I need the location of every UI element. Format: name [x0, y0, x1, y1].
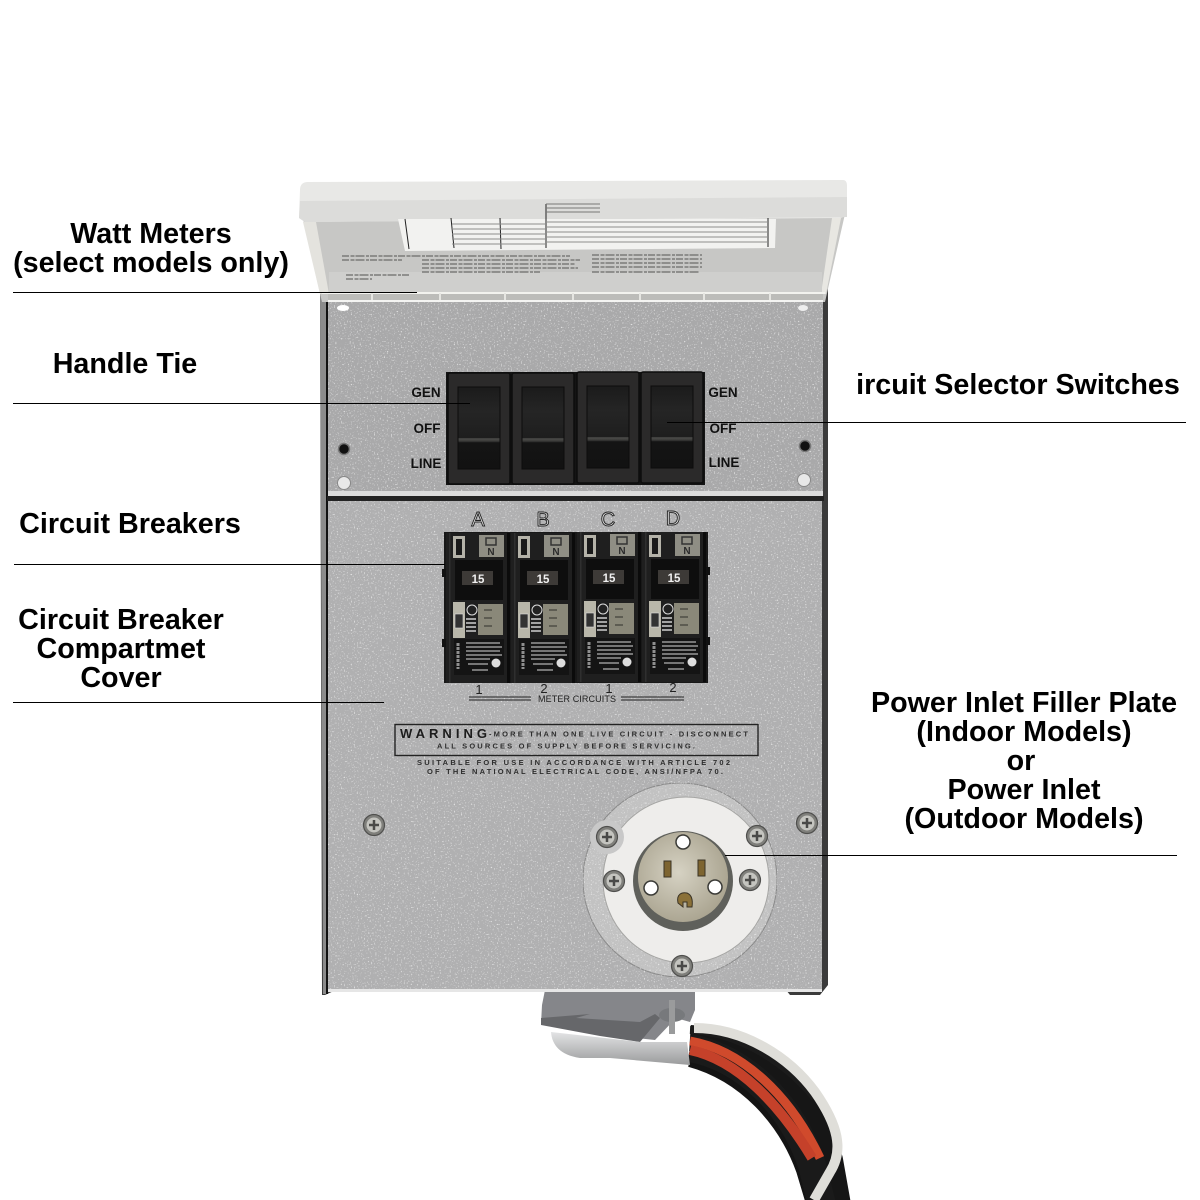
label: power inlet: (Outdoor Models): [904, 803, 1144, 835]
left position labels: LINE: [411, 456, 441, 471]
circuit breaker compartment cover: [328, 501, 822, 991]
code notice: [417, 758, 730, 776]
lid instruction label: [342, 204, 776, 279]
label: power inlet: [871, 687, 1177, 835]
left position labels: GEN: [411, 385, 441, 400]
warning box: WARNING: [400, 726, 487, 741]
right position labels: LINE: [709, 455, 739, 470]
warning box: [395, 724, 758, 756]
code notice: SUITABLE FOR USE IN ACCORDANCE WITH ARTICLE 702: [417, 758, 730, 767]
right position labels: GEN: [708, 385, 738, 400]
label: handle tie: Handle Tie: [53, 348, 197, 380]
label: power inlet: Power Inlet Filler Plate: [871, 687, 1177, 719]
selector switches: [446, 372, 705, 485]
meter circuits label: 2: [669, 680, 677, 695]
breaker letters: C: [601, 509, 615, 531]
circuit breakers: [442, 532, 710, 683]
enclosure body: [320, 288, 828, 995]
right position labels: OFF: [710, 421, 736, 436]
breaker letters: D: [666, 508, 680, 530]
warning box: -MORE THAN ONE LIVE CIRCUIT - DISCONNECT: [489, 730, 748, 738]
upper switch panel: [328, 300, 823, 497]
label: power inlet: or: [1007, 745, 1035, 777]
wiring bundle: [690, 1028, 838, 1200]
label: circuit selector switches: ircuit Selector Switches: [856, 369, 1180, 401]
left position labels: [411, 385, 441, 471]
code notice: OF THE NATIONAL ELECTRICAL CODE, ANSI/NFPA 70.: [427, 767, 723, 776]
mounting holes: [337, 305, 810, 490]
transfer switch enclosure: [299, 180, 847, 995]
meter circuits label: METER CIRCUITS: [538, 694, 616, 704]
meter circuits label: [469, 680, 684, 704]
breaker letters: [471, 508, 680, 531]
meter circuits label: 2: [540, 681, 548, 696]
label: power inlet: (Indoor Models): [916, 716, 1132, 748]
label: circuit breaker compartment cover: Cover: [80, 662, 162, 694]
breaker letters: A: [471, 509, 485, 531]
lid: [299, 180, 847, 302]
conduit fitting: [541, 990, 695, 1065]
label: circuit breaker compartment cover: Compartmet: [37, 633, 206, 665]
power inlet: [583, 783, 777, 977]
left position labels: OFF: [414, 421, 440, 436]
label: watt meters: [13, 218, 289, 279]
label: circuit breaker compartment cover: Circuit Breaker: [18, 604, 224, 636]
label: circuit breaker compartment cover: [18, 604, 224, 694]
label: power inlet: Power Inlet: [947, 774, 1101, 806]
label: circuit breakers: Circuit Breakers: [19, 508, 241, 540]
cover screws: [364, 812, 818, 836]
meter circuits label: 1: [605, 681, 613, 696]
label: watt meters: Watt Meters: [70, 218, 232, 250]
warning box: ALL SOURCES OF SUPPLY BEFORE SERVICING.: [437, 742, 695, 750]
label: watt meters: (select models only): [13, 247, 289, 279]
leader lines: [13, 292, 1186, 856]
breaker letters: B: [536, 509, 550, 531]
meter circuits label: 1: [475, 682, 483, 697]
right position labels: [708, 385, 739, 470]
